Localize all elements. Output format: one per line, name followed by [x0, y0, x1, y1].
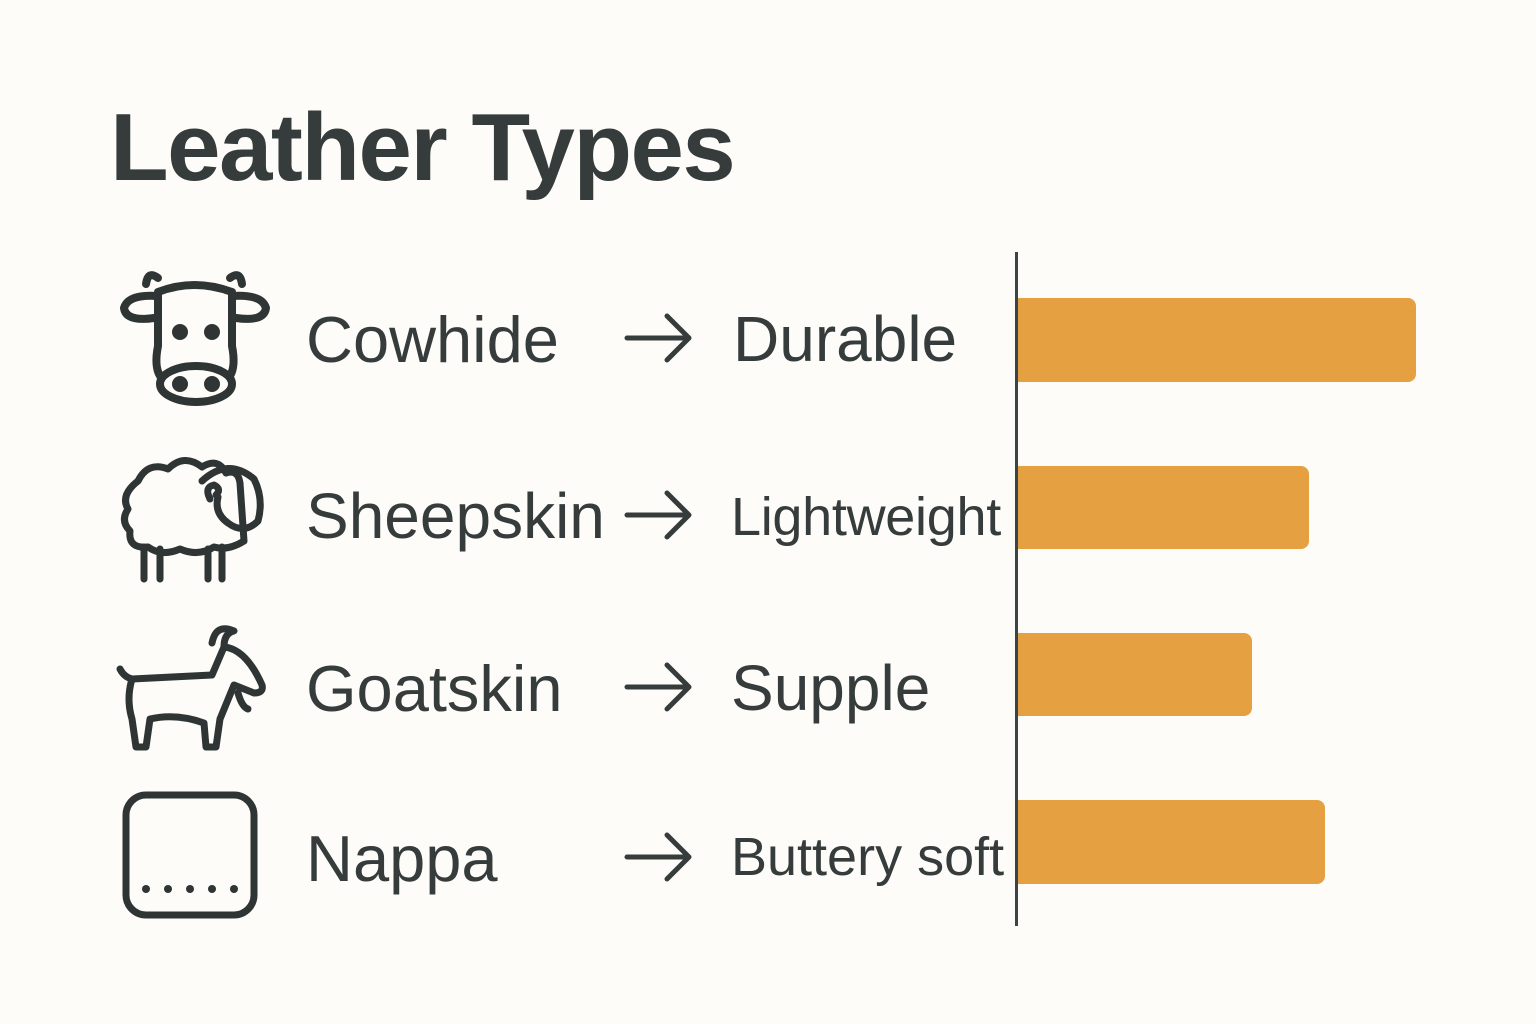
label: Cowhide — [306, 303, 559, 376]
arrow — [624, 662, 692, 712]
row: sheepskin — [120, 457, 1309, 582]
bar — [1018, 298, 1416, 382]
arrow — [624, 832, 692, 882]
icon: goat — [116, 625, 266, 750]
axis line — [1015, 252, 1018, 926]
label: Nappa — [306, 822, 498, 895]
descriptor: Lightweight — [731, 487, 1001, 547]
row: nappa — [122, 792, 1325, 918]
icon: sheep — [120, 457, 264, 582]
descriptor: Buttery soft — [731, 827, 1004, 887]
icon: leather swatch — [122, 792, 258, 918]
label: Sheepskin — [306, 480, 605, 552]
bar — [1018, 800, 1325, 884]
icon: cow — [120, 271, 270, 406]
row: goatskin — [116, 625, 1252, 750]
row: cowhide — [120, 271, 1416, 406]
label: Goatskin — [306, 652, 563, 725]
bar — [1018, 633, 1252, 716]
bar — [1018, 466, 1309, 549]
descriptor: Supple — [731, 652, 930, 724]
title: Leather Types — [110, 94, 734, 201]
arrow — [624, 314, 692, 362]
arrow — [624, 490, 692, 540]
descriptor: Durable — [733, 303, 957, 375]
